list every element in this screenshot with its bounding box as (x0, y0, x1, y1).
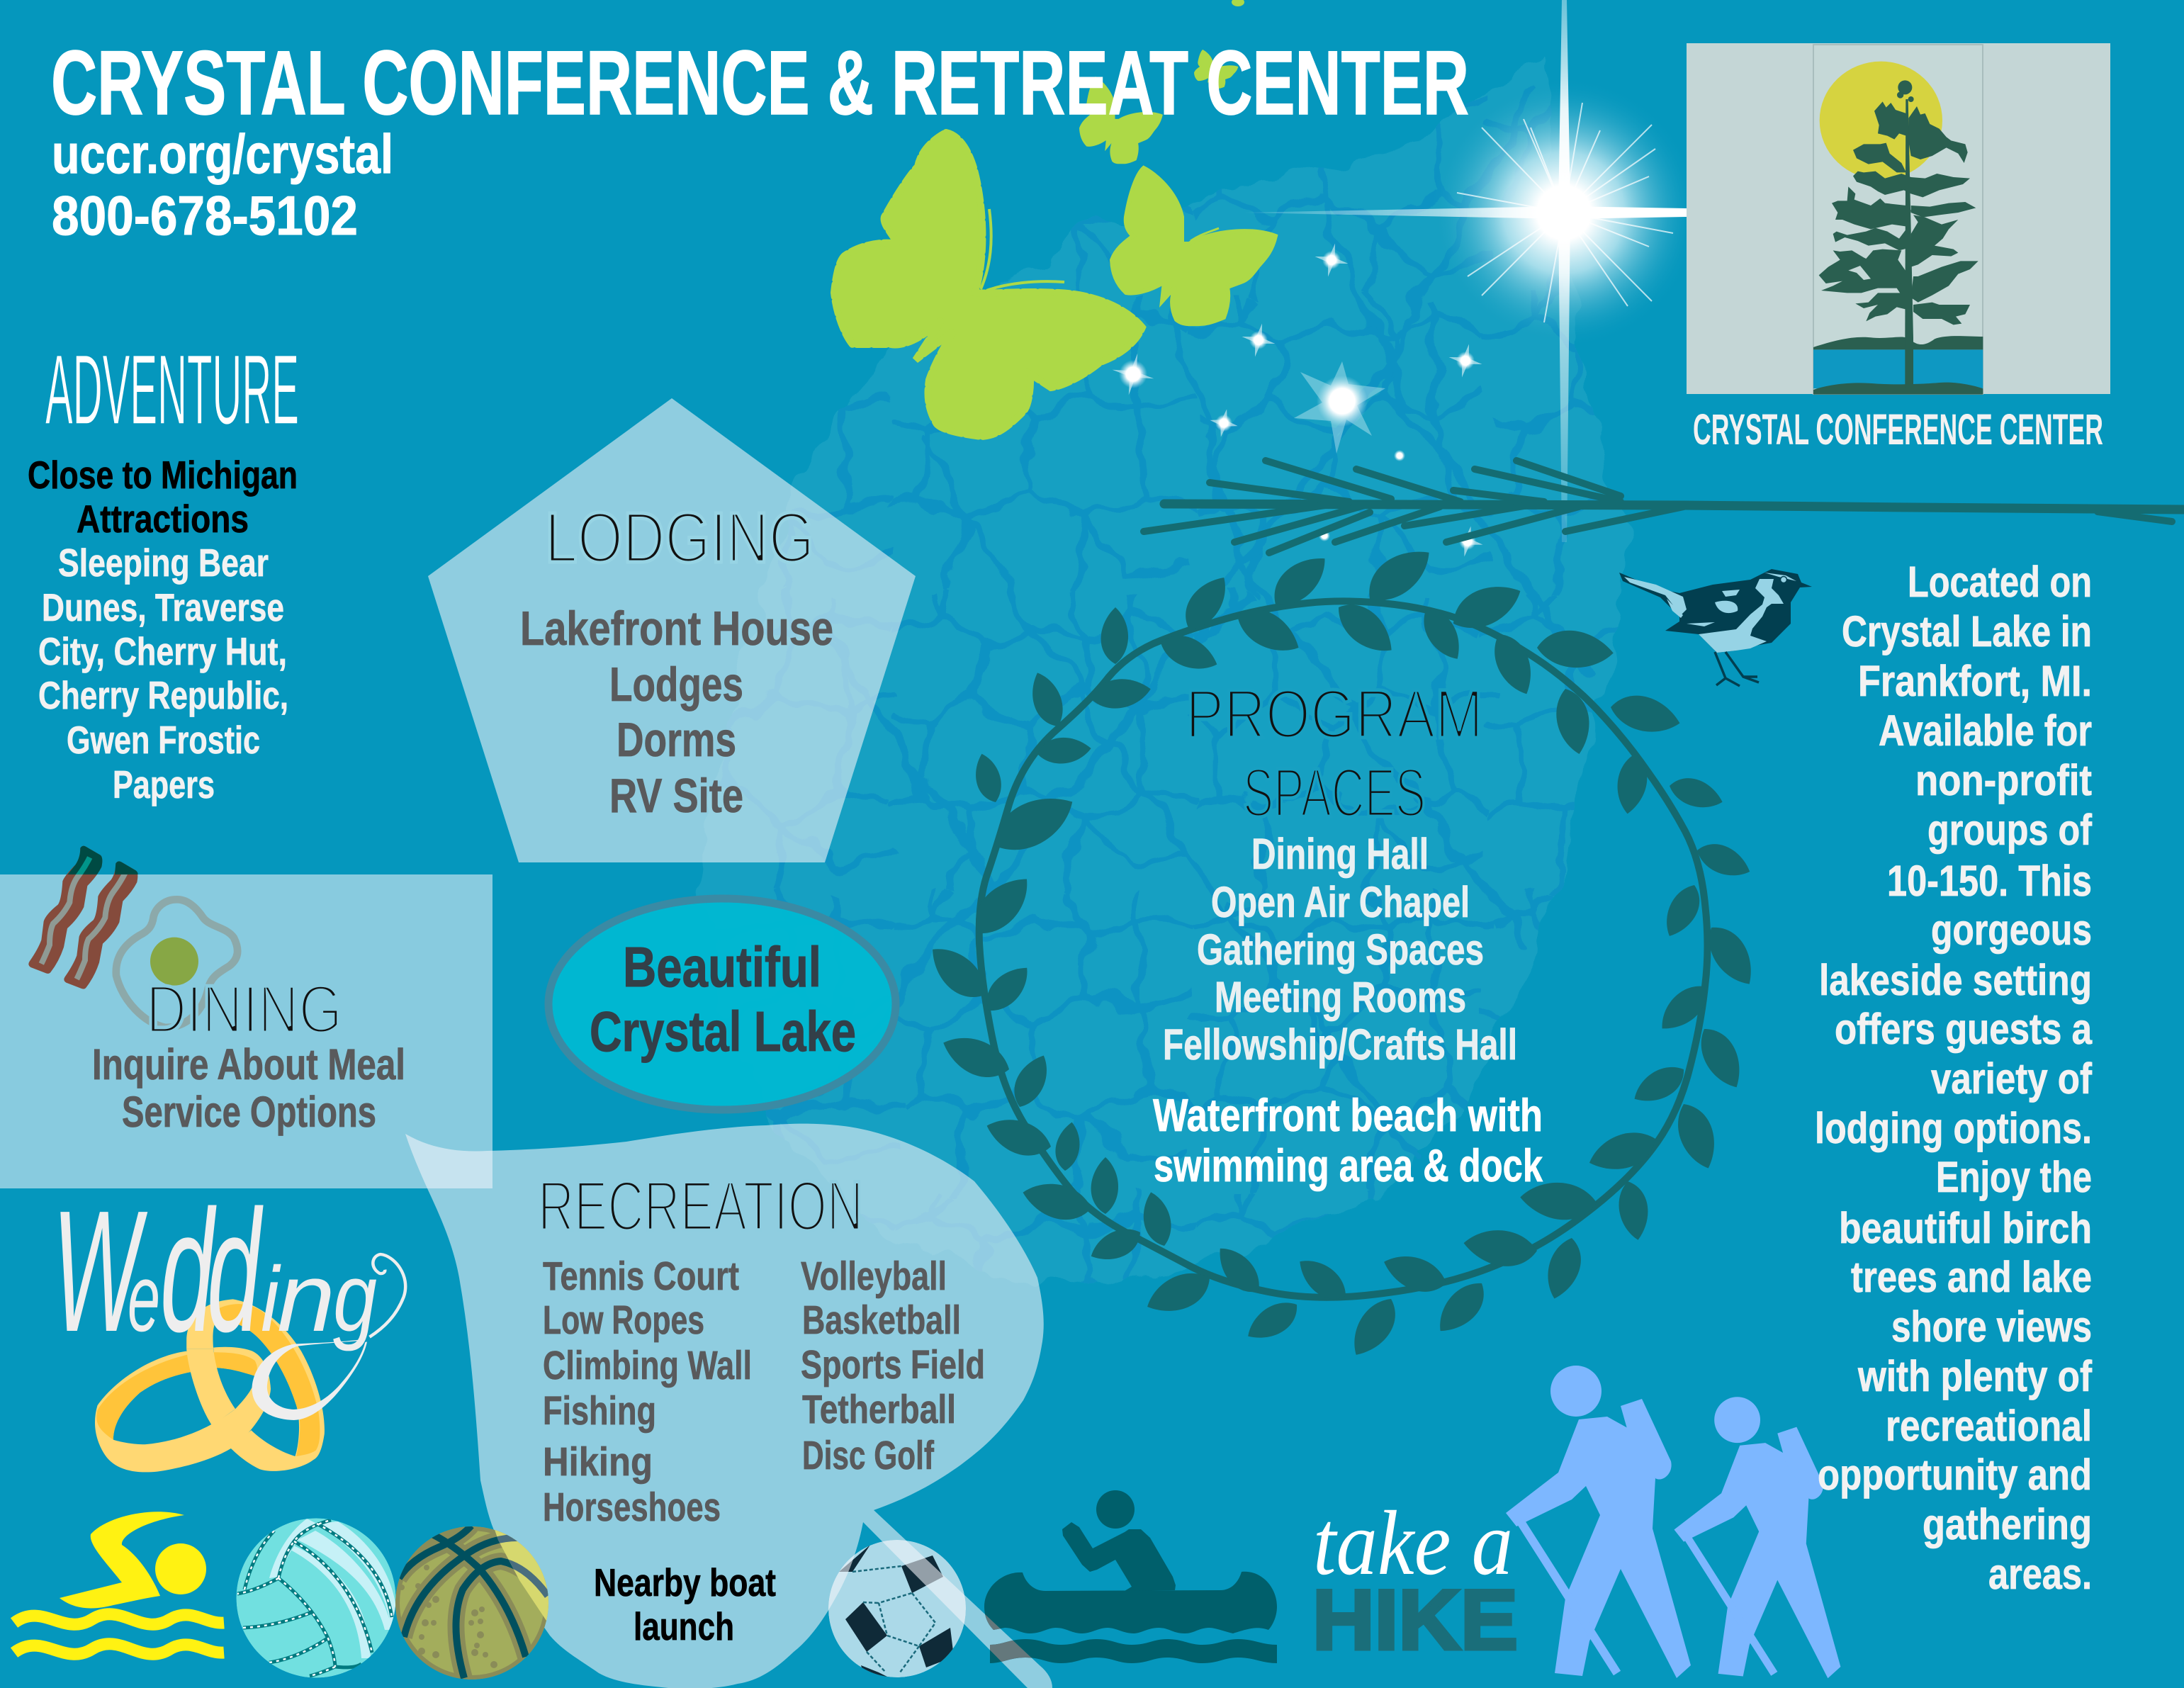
wedding script: W (52, 1174, 148, 1368)
wedding swash (252, 1254, 405, 1420)
icon: bird (1619, 569, 1812, 686)
icon: swimmer (14, 1512, 224, 1654)
panel: recreation (405, 1124, 1052, 1688)
icon: tiny butterfly (1194, 50, 1238, 89)
recreation list column 2 (801, 1254, 985, 1478)
lodging list: Lakefront House (520, 602, 833, 655)
recreation list column 2: Basketball (802, 1298, 961, 1343)
text block: adventure attractions: City, Cherry Hut, (38, 629, 287, 673)
recreation list column 1 (543, 1254, 752, 1530)
location description: opportunity and (1818, 1451, 2092, 1499)
program spaces list: Gathering Spaces (1197, 925, 1484, 974)
location description: Crystal Lake in (1842, 607, 2092, 655)
branch (1144, 461, 2184, 553)
heading: recreation: RECREATION (538, 1166, 863, 1245)
text block: adventure attractions: Dunes, Traverse (42, 585, 284, 629)
text block: adventure attractions (28, 453, 298, 806)
wedding script: e (128, 1244, 160, 1351)
wedding script: g (333, 1244, 377, 1352)
location description: variety of (1931, 1054, 2093, 1103)
recreation list column 2: Tetherball (802, 1387, 956, 1432)
icon: volleyball (237, 1518, 396, 1678)
heading: lodging: LODGING (545, 498, 814, 578)
wreath (921, 537, 1764, 1363)
heading: dining: DINING (146, 972, 342, 1047)
dining text (92, 1040, 405, 1136)
small stars (1108, 240, 1486, 560)
recreation list column 1: Fishing (543, 1388, 656, 1434)
star burst (1244, 0, 1699, 542)
recreation list column 2: Sports Field (801, 1342, 985, 1388)
heading: program spaces: PROGRAM (1186, 675, 1483, 753)
boat launch note: Nearby boat (594, 1560, 776, 1604)
icon: hikers (1506, 1366, 1840, 1678)
icon: canoe (984, 1490, 1277, 1663)
recreation list column 1: Hiking (543, 1439, 653, 1485)
website and phone: uccr.org/crystal (52, 123, 393, 185)
location description: Frankfort, MI. (1858, 657, 2092, 705)
location description: beautiful birch (1839, 1204, 2092, 1252)
text block: adventure attractions: Close to Michigan (28, 453, 298, 497)
heading: program spaces: SPACES (1243, 754, 1426, 831)
icon: bacon strip one (28, 846, 102, 974)
lodging list (520, 602, 833, 823)
dining text: Inquire About Meal (92, 1040, 405, 1088)
lodging list: Lodges (609, 658, 743, 711)
location description: areas. (1988, 1550, 2092, 1598)
icon: fried egg (116, 899, 237, 1028)
text block: adventure attractions: Gwen Frostic (67, 718, 260, 762)
text block: adventure attractions: Papers (113, 763, 215, 806)
lodging list: Dorms (617, 713, 736, 767)
website and phone: 800-678-5102 (52, 184, 358, 247)
icon: small butterfly (1079, 77, 1163, 164)
icon: soccer ball (828, 1540, 966, 1679)
wedding script: i (261, 1247, 281, 1351)
program spaces list (1163, 830, 1517, 1069)
take a hike: HIKE (1312, 1572, 1518, 1667)
lake callout: Beautiful (623, 935, 821, 998)
text block: adventure attractions: Cherry Republic, (38, 673, 288, 717)
take a hike: take a (1313, 1492, 1513, 1594)
location description: lakeside setting (1819, 956, 2092, 1004)
location description: non-profit (1915, 756, 2092, 804)
location description: recreational (1886, 1402, 2092, 1450)
location description: groups of (1927, 806, 2093, 854)
icon: medium butterfly (1112, 168, 1276, 324)
logo pine tree and sun (1813, 62, 1983, 395)
program spaces list: Meeting Rooms (1215, 973, 1466, 1021)
icon: bacon strip two (64, 861, 138, 989)
recreation list column 1: Horseshoes (543, 1485, 721, 1530)
location description (1815, 558, 2093, 1598)
recreation list column 2: Volleyball (801, 1254, 947, 1299)
wedding script: d (160, 1174, 217, 1368)
text block: adventure attractions: Sleeping Bear (58, 541, 269, 585)
program spaces list: Dining Hall (1251, 830, 1429, 878)
icon: wedding rings (95, 1299, 325, 1472)
location description: 10-150. This (1887, 857, 2092, 905)
website and phone (52, 123, 393, 247)
lake callout (548, 899, 896, 1110)
location description: lodging options. (1815, 1104, 2092, 1152)
lodging list: RV Site (609, 769, 743, 823)
location description: gorgeous (1931, 906, 2092, 954)
wedding script: d (207, 1174, 264, 1368)
recreation list column 2: Disc Golf (802, 1433, 935, 1478)
waterfront text (1153, 1089, 1543, 1191)
wedding script (52, 1174, 405, 1420)
program spaces list: Fellowship/Crafts Hall (1163, 1020, 1517, 1069)
logo panel (1687, 43, 2110, 395)
location description: trees and lake (1851, 1253, 2092, 1301)
icon: hiker two (1674, 1397, 1840, 1678)
location description: Enjoy the (1936, 1153, 2092, 1201)
icon: basketball (395, 1526, 548, 1679)
lake callout: Crystal Lake (590, 1000, 856, 1063)
take a hike (1312, 1492, 1518, 1667)
location description: Located on (1908, 558, 2092, 606)
recreation list column 1: Climbing Wall (543, 1343, 752, 1388)
background leaf with veins (696, 55, 1628, 1291)
text: ADVENTURE (45, 334, 299, 445)
waterfront text: swimming area & dock (1154, 1140, 1543, 1191)
location description: gathering (1923, 1500, 2092, 1548)
location description: shore views (1891, 1302, 2092, 1351)
recreation list column 1: Tennis Court (543, 1254, 739, 1299)
icon: bacon and egg (28, 846, 237, 1028)
location description: offers guests a (1835, 1005, 2093, 1053)
panel: lodging (428, 398, 916, 862)
program spaces list: Open Air Chapel (1211, 878, 1470, 926)
title: CRYSTAL CONFERENCE & RETREAT CENTER (51, 33, 1469, 134)
boat launch note: launch (634, 1604, 734, 1648)
text block: adventure attractions: Attractions (77, 497, 249, 541)
icon: butterfly at top edge (1232, 0, 1244, 6)
heading: program spaces (1186, 675, 1483, 831)
location description: Available for (1879, 707, 2092, 755)
recreation list column 1: Low Ropes (543, 1298, 704, 1343)
wedding script: n (277, 1244, 335, 1352)
icon: hiker one (1506, 1366, 1691, 1678)
waterfront text: Waterfront beach with (1153, 1089, 1543, 1141)
panel: dining (0, 846, 492, 1188)
dining text: Service Options (122, 1088, 376, 1136)
boat launch note (594, 1560, 776, 1648)
location description: with plenty of (1857, 1352, 2093, 1400)
icon: large butterfly (834, 133, 1142, 437)
